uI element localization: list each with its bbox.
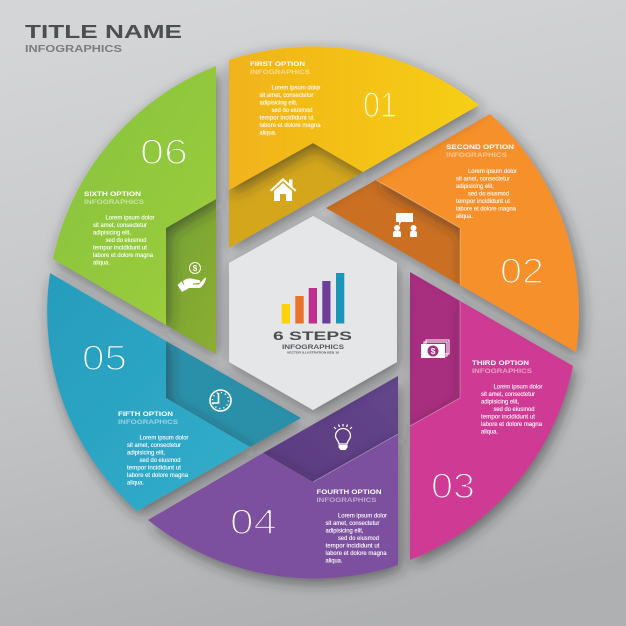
text: first option: FIRST OPTION [250, 62, 305, 68]
hexagon [229, 216, 397, 410]
text: third option: sed do eiusmod [494, 406, 535, 413]
text: fifth option: Lorem ipsum dolor [140, 434, 189, 442]
magenta segment [410, 301, 573, 560]
text: sixth option: labore et dolore magna [93, 252, 153, 259]
text: fifth option: aliqua. [127, 480, 144, 486]
magenta inner fold [410, 272, 460, 426]
text: first option [250, 62, 321, 136]
text: fourth option: sit amet, consectetur [326, 520, 380, 527]
text: fourth option: FOURTH OPTION [316, 490, 382, 496]
text: second option: SECOND OPTION [446, 145, 514, 151]
text: fourth option: Lorem ipsum dolor [338, 512, 388, 520]
text: third option: adipisicing elit, [481, 398, 519, 406]
text: third option: INFOGRAPHICS [472, 369, 532, 375]
orange inner fold [326, 180, 460, 285]
text: fifth option: INFOGRAPHICS [118, 420, 178, 426]
text: second option: Lorem ipsum dolor [468, 168, 518, 175]
center heading: 6 STEPS [273, 329, 352, 343]
text: second option: adipisicing elit, [456, 183, 494, 190]
text: third option: labore et dolore magna [481, 421, 542, 428]
yellow segment [229, 47, 479, 190]
text: second option: aliqua. [456, 213, 473, 220]
panel: center hexagon [229, 216, 397, 410]
icon: hand with coin [178, 262, 206, 292]
center heading: INFOGRAPHICS [282, 344, 344, 351]
text: sixth option: sed do eiusmod [106, 237, 147, 244]
number 06: 06 [140, 133, 188, 172]
icon: house [270, 178, 296, 201]
icon: hand with coin: $ [193, 264, 198, 273]
icon: two people with speech bubble [393, 213, 417, 237]
icon: clock [210, 390, 231, 411]
text: second option: tempor incididunt ut [456, 198, 510, 205]
text: sixth option: INFOGRAPHICS [84, 200, 144, 206]
number 05: 05 [82, 339, 127, 378]
text: first option: sed do eiusmod [272, 107, 313, 114]
text: first option: sit amet, consectetur [260, 92, 314, 99]
bar chart [282, 273, 344, 324]
text: fourth option: labore et dolore magna [326, 550, 387, 557]
purple segment [148, 434, 398, 578]
text: first option: tempor incididunt ut [260, 114, 314, 122]
text: first option: Lorem ipsum dolor [272, 84, 321, 92]
text: fifth option: tempor incididunt ut [127, 464, 181, 472]
panel: second option [326, 114, 579, 352]
text: sixth option: tempor incididunt ut [93, 244, 147, 252]
purple inner fold [263, 376, 398, 482]
text: third option: THIRD OPTION [472, 361, 529, 367]
text: sixth option: sit amet, consectetur [93, 222, 148, 229]
text: third option: aliqua. [481, 428, 498, 436]
green segment [53, 66, 216, 325]
panel: third option [410, 272, 573, 560]
text: fifth option: sed do eiusmod [140, 457, 181, 464]
text: fifth option: labore et dolore magna [127, 472, 188, 479]
text: fourth option: INFOGRAPHICS [316, 498, 376, 504]
panel: fourth option [148, 376, 398, 578]
text: second option: labore et dolore magna [456, 206, 516, 212]
orange segment [376, 114, 579, 352]
text: sixth option [84, 192, 155, 266]
text: fourth option: sed do eiusmod [338, 535, 379, 542]
text: sixth option: Lorem ipsum dolor [106, 214, 155, 222]
text: second option: INFOGRAPHICS [446, 153, 507, 159]
text: fourth option [316, 490, 388, 564]
number 02: 02 [500, 252, 544, 291]
text: first option: aliqua. [260, 130, 277, 136]
icon: light bulb [334, 424, 352, 450]
title: INFOGRAPHICS [25, 44, 122, 55]
text: fifth option [118, 412, 189, 486]
panel: first option [229, 47, 479, 248]
text: third option: tempor incididunt ut [481, 414, 535, 420]
text: second option [446, 145, 518, 220]
text: sixth option: SIXTH OPTION [84, 192, 141, 198]
text: fourth option: tempor incididunt ut [326, 542, 380, 550]
number 04: 04 [230, 503, 277, 542]
text: fifth option: FIFTH OPTION [118, 412, 173, 418]
icon: banknotes: $ [431, 346, 436, 356]
panel: sixth option [53, 66, 216, 354]
center heading [273, 329, 352, 354]
blue segment [47, 273, 250, 511]
title [25, 22, 182, 55]
text: second option: sed do eiusmod [468, 190, 509, 198]
text: first option: labore et dolore magna [260, 122, 321, 129]
text: fifth option: adipisicing elit, [127, 450, 165, 456]
text: sixth option: aliqua. [93, 260, 110, 266]
icon: banknotes [421, 340, 449, 358]
text: second option: sit amet, consectetur [456, 176, 511, 182]
number 03: 03 [431, 467, 475, 506]
yellow inner fold [229, 143, 363, 248]
text: fifth option: sit amet, consectetur [127, 442, 182, 449]
text: third option [472, 361, 543, 436]
green inner fold [166, 199, 216, 354]
number 01: 01 [363, 86, 397, 125]
text: sixth option: adipisicing elit, [93, 230, 131, 236]
text: third option: sit amet, consectetur [481, 391, 536, 398]
text: third option: Lorem ipsum dolor [494, 384, 543, 390]
center heading: VECTOR ILLUSTRATION BEB 10 [287, 350, 340, 354]
title: TITLE NAME [25, 22, 182, 42]
text: fourth option: aliqua. [326, 558, 343, 564]
text: first option: adipisicing elit, [260, 100, 298, 106]
text: fourth option: adipisicing elit, [326, 528, 364, 534]
panel: fifth option [47, 273, 301, 511]
blue inner fold [166, 341, 301, 447]
text: first option: INFOGRAPHICS [250, 70, 310, 76]
